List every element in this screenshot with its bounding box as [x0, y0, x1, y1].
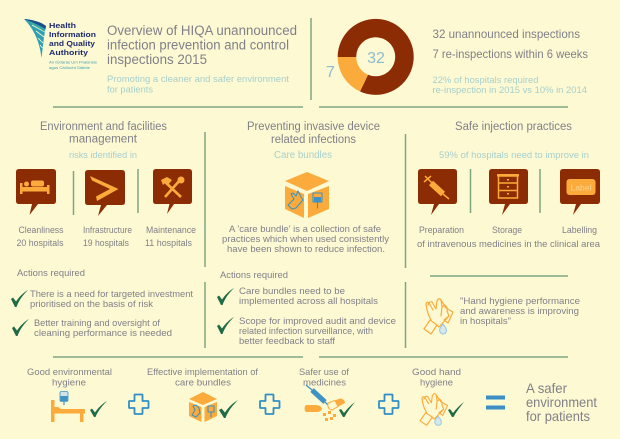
heading: Actions required	[220, 270, 288, 281]
heading	[247, 121, 380, 146]
labels: Storage	[492, 225, 522, 236]
icon: bed and drip	[51, 392, 85, 422]
icon: plus	[379, 394, 398, 414]
heading: Preventing invasive device	[247, 121, 380, 133]
subheading: 59% of hospitals need to improve in	[439, 150, 589, 161]
logo: Health Information and Quality Authority: Health	[49, 21, 76, 30]
icon: check	[217, 317, 234, 334]
inspection figures: 32 unannounced inspections	[432, 27, 580, 41]
heading: related infections	[271, 134, 356, 146]
quote	[460, 296, 580, 327]
panel: actions required, environment	[11, 268, 193, 339]
inspection figures	[432, 27, 588, 61]
icon: check	[219, 400, 238, 418]
title: Overview of HIQA unannounced	[107, 23, 297, 38]
labels	[417, 225, 601, 250]
quote: in hospitals"	[460, 316, 511, 327]
conclusion	[526, 380, 597, 424]
labels: Effective implementation of	[147, 367, 258, 378]
re-inspection comparison: re-inspection in 2015 vs 10% in 2014	[432, 85, 587, 95]
icon: label	[560, 169, 600, 215]
icon: syringe and capsules	[304, 385, 345, 421]
labels: Safer use of	[299, 367, 349, 378]
labels: Preparation	[419, 225, 464, 236]
re-inspection comparison: 22% of hospitals required	[432, 75, 538, 85]
conclusion: environment	[526, 394, 597, 410]
action text	[239, 286, 378, 307]
labels: care bundles	[175, 378, 231, 388]
action text: Care bundles need to be	[239, 286, 345, 297]
subheading: risks identified in	[69, 150, 137, 161]
panel: summary equation	[27, 367, 597, 425]
logo: Health Information and Quality Authority: Information	[49, 30, 96, 39]
action text	[239, 316, 396, 347]
icon: logo fan	[24, 19, 46, 58]
icon: equals	[486, 396, 505, 410]
labels: medicines	[303, 378, 346, 388]
panel: actions required, care bundles	[217, 270, 396, 347]
donut chart: inspections: 7	[326, 64, 335, 81]
title: infection prevention and control	[107, 38, 289, 52]
icon: bed	[16, 169, 56, 215]
labels: 11 hospitals	[145, 238, 192, 248]
icon: hands	[420, 394, 448, 425]
labels: 19 hospitals	[83, 238, 129, 248]
quote: and awareness is improving	[460, 306, 579, 317]
labels: hygiene	[52, 378, 86, 388]
labels: Good environmental	[27, 367, 112, 378]
icon: plus	[129, 394, 148, 414]
labels: Good hand	[412, 367, 461, 378]
icon: care bundle box	[189, 392, 217, 422]
labels	[27, 367, 461, 388]
icon: care bundle box	[285, 172, 329, 218]
icon: label: Label	[571, 182, 592, 192]
icon: check	[217, 288, 234, 305]
title	[107, 23, 297, 67]
title: inspections 2015	[107, 52, 207, 67]
donut segment: 32 inspections	[338, 19, 414, 95]
icon: check	[90, 401, 107, 417]
labels: Labelling	[562, 225, 597, 236]
labels: of intravenous medicines in the clinical area	[417, 239, 601, 250]
action text: related infection surveillance, with	[239, 326, 373, 337]
labels: Maintenance	[146, 225, 196, 235]
action text	[30, 289, 193, 310]
labels: 20 hospitals	[16, 238, 64, 248]
description	[222, 224, 389, 255]
logo: Health Information and Quality Authority: and Quality	[49, 39, 96, 48]
description: have been shown to reduce infection.	[227, 244, 385, 255]
action text: There is a need for targeted investment	[30, 289, 193, 300]
action text	[34, 318, 172, 339]
panel: preventing invasive device related infections	[222, 121, 389, 255]
logo: Health Information and Quality Authority: An tÚdarás Um Fhaisnéis	[49, 60, 97, 64]
heading: Environment and facilities	[40, 121, 167, 133]
action text: implemented across all hospitals	[239, 296, 378, 307]
heading: Actions required	[17, 268, 85, 279]
quote: "Hand hygiene performance	[460, 296, 580, 307]
icon: check	[339, 402, 355, 417]
subtitle: Promoting a cleaner and safer environment	[107, 74, 289, 85]
inspection figures: 7 re-inspections within 6 weeks	[432, 47, 588, 61]
callout: hand hygiene	[424, 296, 580, 334]
labels: Infrastructure	[83, 225, 132, 235]
labels: Cleanliness	[18, 225, 64, 235]
subtitle	[107, 74, 289, 96]
conclusion: A safer	[526, 380, 567, 396]
conclusion: for patients	[526, 408, 590, 424]
panel: safe injection practices	[417, 121, 601, 250]
icon: check	[448, 402, 464, 417]
heading	[40, 121, 167, 146]
description: practices which when used consistently	[222, 234, 389, 245]
logo: Health Information and Quality Authority: agus Cáilíocht Sláinte	[49, 66, 90, 70]
action text: Scope for improved audit and device	[239, 316, 396, 327]
logo: Health Information and Quality Authority	[24, 19, 97, 70]
icon: hands	[424, 299, 453, 334]
labels: hygiene	[420, 378, 453, 388]
subtitle: for patients	[107, 84, 153, 96]
icon: check	[11, 290, 28, 307]
heading: management	[69, 134, 138, 146]
re-inspection comparison	[432, 75, 587, 95]
logo: Health Information and Quality Authority: Authority	[49, 48, 89, 57]
action text: Better training and oversight of	[34, 318, 160, 329]
icon: syringe	[418, 169, 457, 215]
icon: plus	[260, 394, 280, 414]
heading: Safe injection practices	[455, 121, 572, 133]
subheading: Care bundles	[274, 150, 332, 161]
panel: environment and facilities	[16, 121, 196, 248]
donut chart: inspections: 32	[367, 50, 385, 67]
icon: storage cabinet	[489, 169, 528, 215]
labels	[16, 225, 196, 248]
donut chart: inspections	[326, 19, 414, 95]
icon: infrastructure	[85, 170, 125, 216]
icon: tools	[153, 169, 192, 214]
icon: check	[12, 319, 29, 336]
action text: prioritised on the basis of risk	[30, 299, 153, 310]
description: A 'care bundle' is a collection of safe	[229, 224, 381, 235]
action text: cleaning performance is needed	[34, 328, 172, 339]
action text: better feedback to staff	[239, 336, 335, 347]
donut segment: 7 re-inspections	[338, 57, 368, 92]
